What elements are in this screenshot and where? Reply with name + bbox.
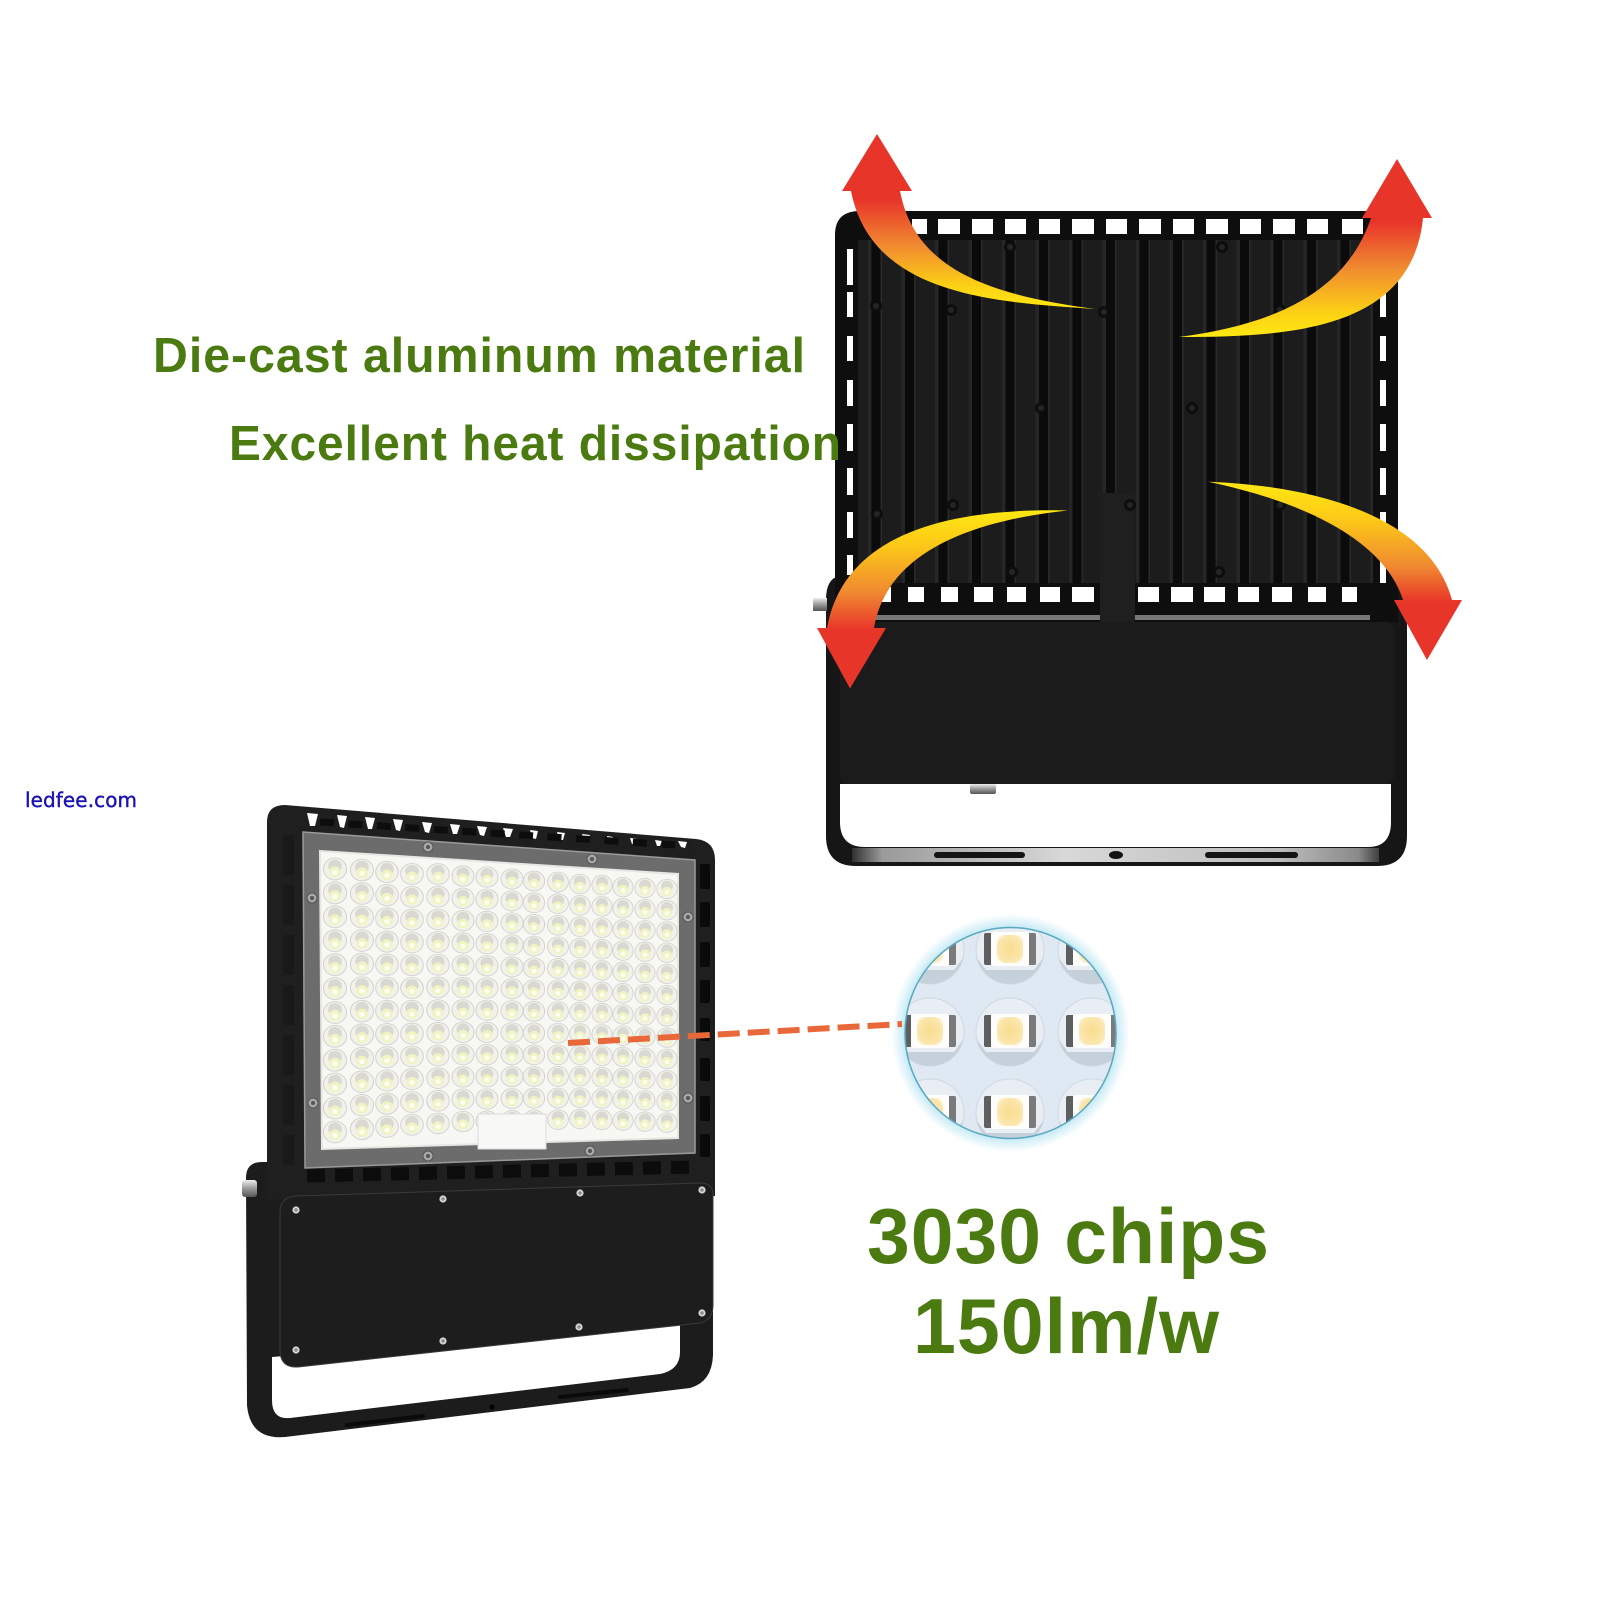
- heatsink bolts: [870, 241, 1362, 578]
- watermark: ledfee.com: [25, 788, 137, 812]
- dashed pointer line: [568, 1024, 902, 1043]
- right side vents: [700, 864, 710, 1157]
- heading: die-cast aluminum material: Die-cast aluminum material: [153, 329, 806, 383]
- center stem: [1100, 493, 1135, 622]
- front driver panel: [280, 1183, 713, 1367]
- top vents: [307, 813, 687, 848]
- front view flood light: [242, 805, 715, 1437]
- chip type label: 3030 chips: [867, 1192, 1270, 1280]
- rear view flood light: [813, 211, 1407, 866]
- LED array: [323, 858, 677, 1143]
- magnifier disc: [905, 928, 1116, 1138]
- lower vents: [307, 1167, 692, 1176]
- heat arrow: bottom left: [817, 510, 1068, 688]
- bottom nut: [970, 784, 996, 794]
- magnifier ring: [905, 928, 1116, 1138]
- driver panel screws: [292, 1186, 706, 1354]
- rear mounting bracket: [826, 576, 1407, 866]
- lower silver edge: [865, 615, 1370, 620]
- LED board: [320, 851, 678, 1149]
- top vent slots: [912, 219, 1363, 234]
- zoomed chips: [906, 928, 1116, 1138]
- bottom vent slots: [880, 587, 1357, 602]
- heatsink fins: [858, 240, 1373, 583]
- heatsink housing: [835, 211, 1398, 622]
- magnifier glow: [892, 914, 1130, 1152]
- rear driver panel: [840, 622, 1394, 784]
- left side slots: [847, 249, 853, 575]
- heat arrow: top left: [842, 134, 1095, 309]
- bracket hole: [490, 1404, 494, 1410]
- silver bracket strip: [852, 848, 1379, 862]
- left side vents: [283, 835, 294, 1165]
- side bolt: [813, 598, 827, 611]
- pivot bolt: [242, 1180, 257, 1197]
- bracket slots: [934, 851, 1298, 859]
- heat arrow: top right: [1179, 159, 1432, 337]
- bracket slots: [347, 1390, 627, 1425]
- luminous efficacy label: 150lm/w: [913, 1282, 1220, 1370]
- lens frame screws: [307, 842, 693, 1161]
- front housing: [267, 805, 715, 1200]
- heat arrow: bottom right: [1208, 482, 1462, 660]
- dark vent blocks top: [320, 822, 690, 846]
- front mounting bracket: [246, 1162, 713, 1437]
- lens frame: [303, 832, 695, 1168]
- label on LED board: [478, 1114, 546, 1149]
- heading: excellent heat dissipation: Excellent heat dissipation: [229, 417, 842, 471]
- right side slots: [1380, 292, 1386, 583]
- LED chip magnifier: [892, 914, 1130, 1152]
